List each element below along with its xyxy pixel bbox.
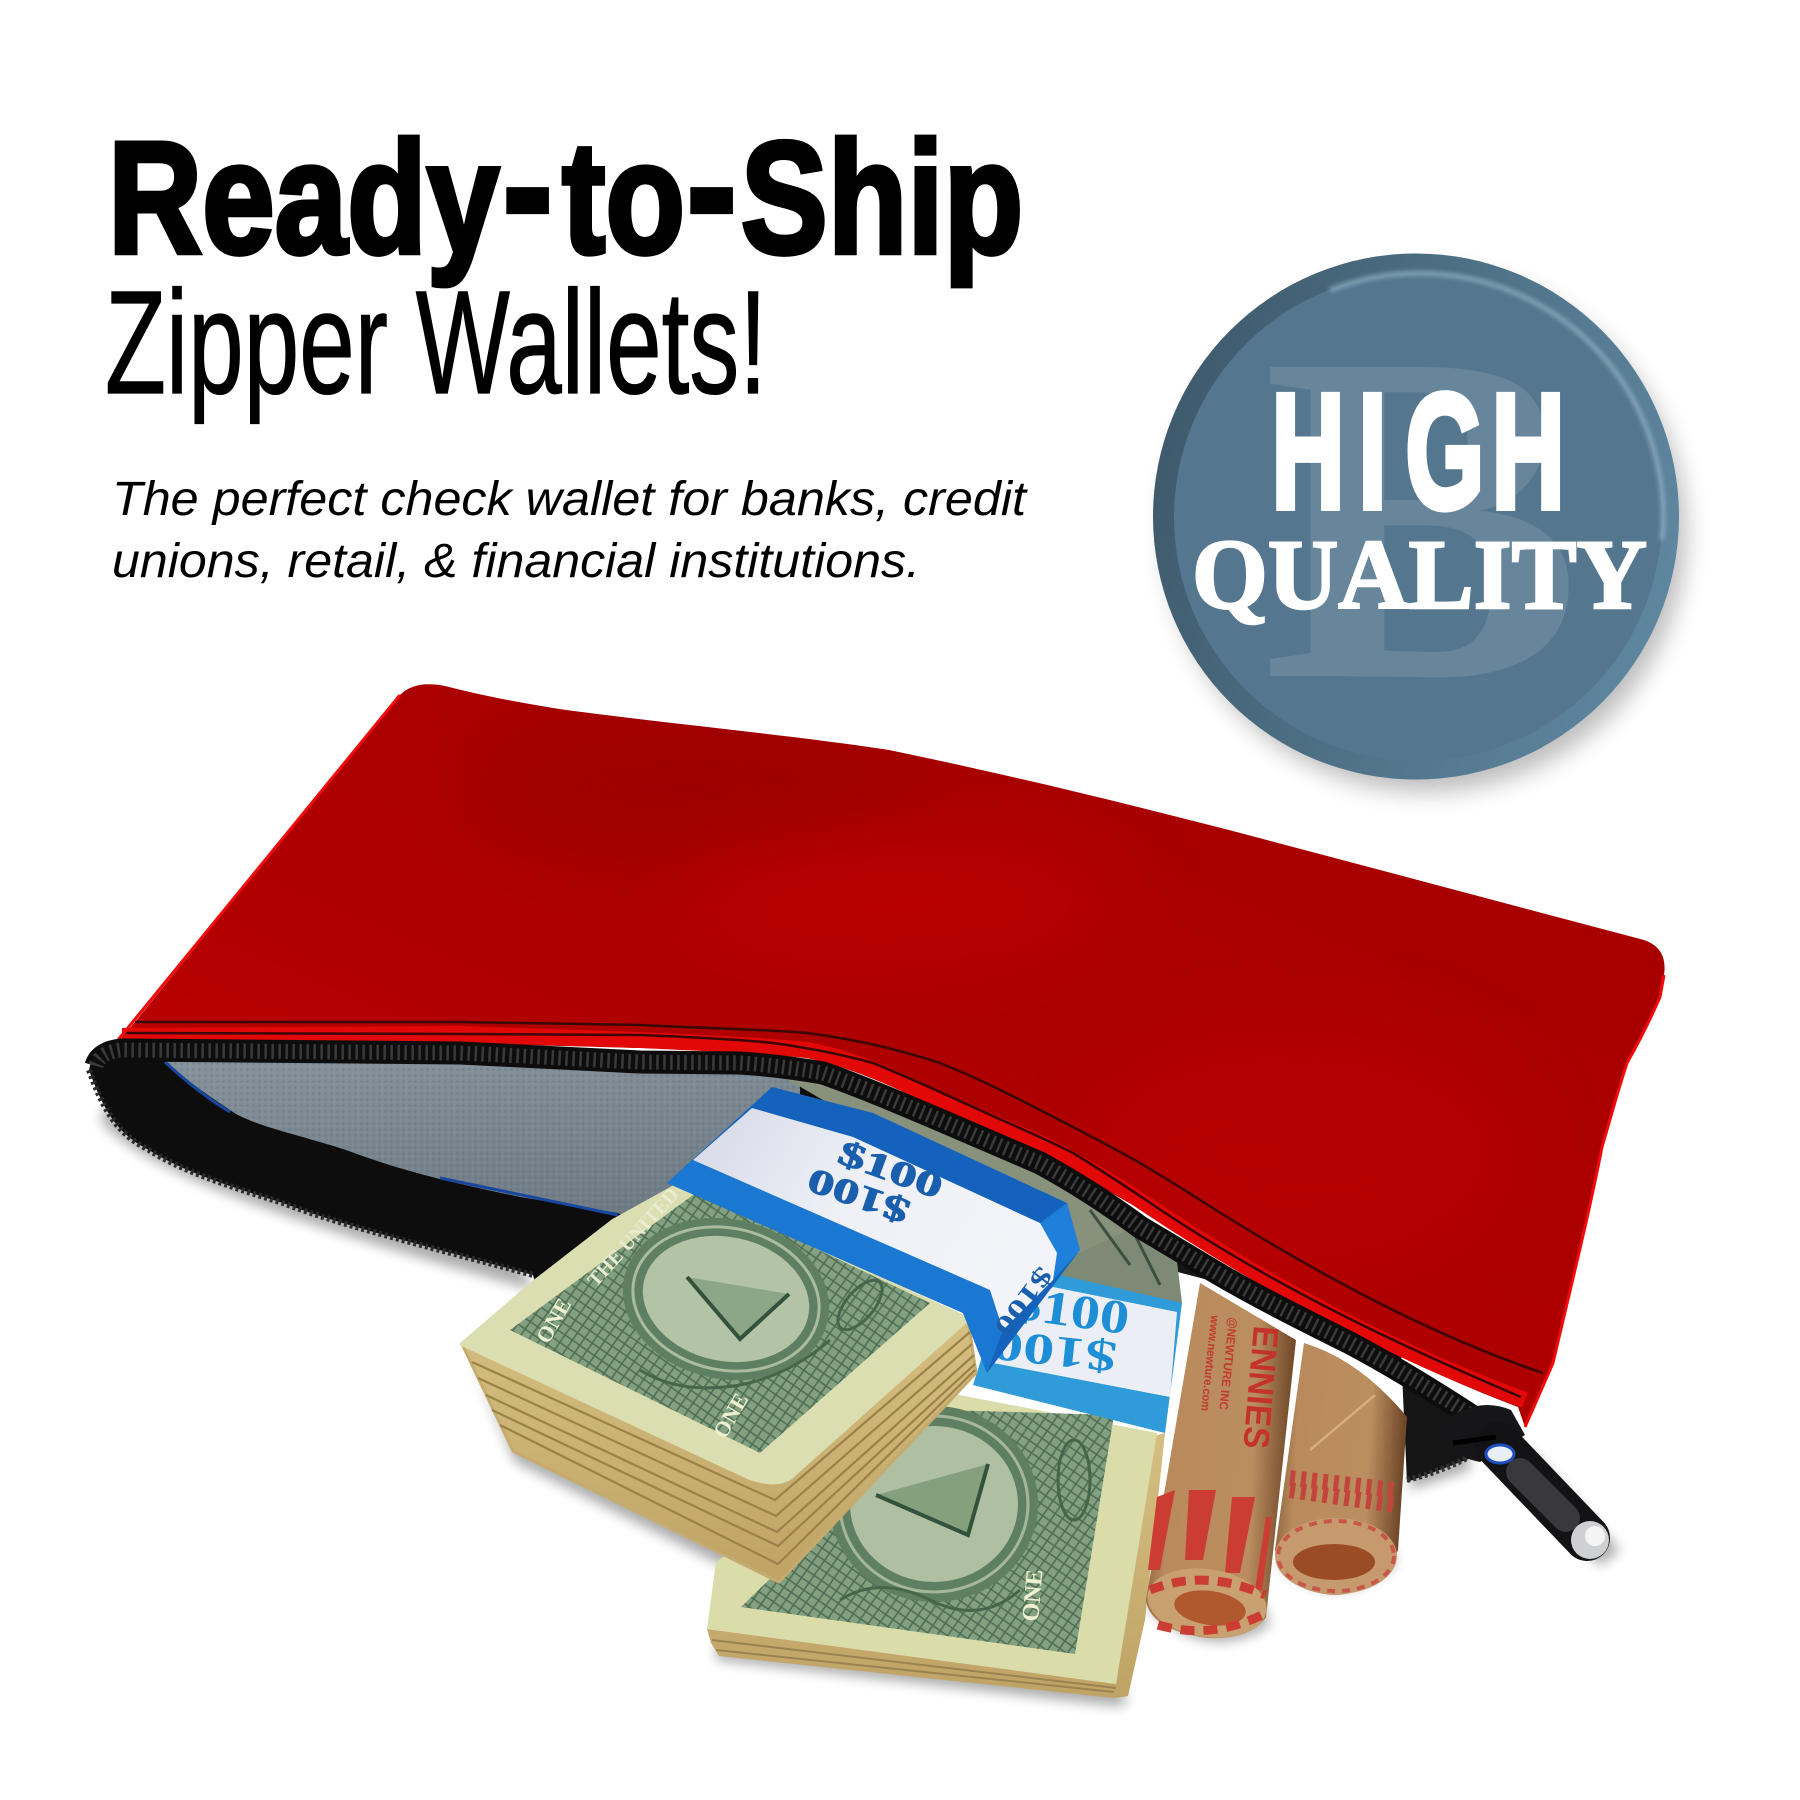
description text: The perfect check wallet for banks, credit (112, 473, 1028, 526)
zipper teeth (96, 1050, 1478, 1480)
product illustration: wallet with cash and coins (89, 684, 1665, 1706)
coin roll 1: pennies (1143, 1283, 1296, 1645)
engraved rosettes (840, 1440, 1090, 1610)
title: Ready-to-Ship: - (686, 81, 737, 289)
stitching lower (125, 1033, 1521, 1397)
band text on side: $100 (988, 1261, 1058, 1341)
roll lettering: ENNIES (1235, 1324, 1287, 1450)
title: Ready-to-Ship: - (502, 81, 553, 289)
bright edge (118, 695, 1664, 1427)
bright seam band (122, 1034, 1525, 1400)
badge word HIGH: HIGH (1272, 360, 1565, 542)
roll small print: www.newture.com (1198, 1314, 1222, 1412)
wallet underside: black tape and lining (89, 1043, 1471, 1482)
title: Ready-to-Ship: Ship (741, 108, 1023, 287)
description text (112, 473, 1028, 588)
cash band 2: $100 (973, 1275, 1182, 1433)
description text: unions, retail, & financial institutions. (112, 535, 920, 588)
bill denomination bottom: ONE (708, 1389, 753, 1442)
band text inverted: $100 (803, 1160, 915, 1231)
badge word QUALITY: QUALITY (1192, 519, 1647, 630)
grey lining (160, 1057, 800, 1240)
title: Ready-to-Ship: to (562, 108, 685, 287)
dark pocket behind cash (770, 1070, 1471, 1482)
bill denomination left: ONE (531, 1294, 576, 1348)
red wallet body (118, 684, 1665, 1427)
watermark letter B: B (1262, 256, 1582, 779)
bill lettering: THE UNITED (583, 1184, 683, 1291)
coin roll 2 (1275, 1343, 1407, 1595)
badge: high quality (1153, 254, 1686, 792)
bills visible inside pocket (780, 1075, 1182, 1303)
fabric shading (460, 720, 1520, 1270)
infographic canvas (85, 134, 1698, 1712)
cash band 1: $100 (667, 1087, 1080, 1373)
band text inverted: $100 (990, 1320, 1119, 1382)
cash stack 1 (462, 1184, 976, 1582)
zipper pull tab (1439, 1405, 1609, 1559)
cash stack 2 (707, 1393, 1165, 1698)
band text: $100 (1009, 1276, 1133, 1345)
bill denomination: ONE (1018, 1568, 1049, 1623)
title: Ready-to-Ship: Ready (108, 108, 499, 287)
band text upright: $100 (833, 1133, 948, 1206)
ground shadows (100, 1100, 1620, 1706)
roll small print: @NEWTURE INC (1216, 1317, 1240, 1411)
stitching upper (135, 1022, 1543, 1373)
roll small print (1198, 1314, 1240, 1414)
engraved rosettes (640, 1273, 890, 1388)
subtitle: Zipper Wallets!: Zipper Wallets! (105, 261, 767, 425)
